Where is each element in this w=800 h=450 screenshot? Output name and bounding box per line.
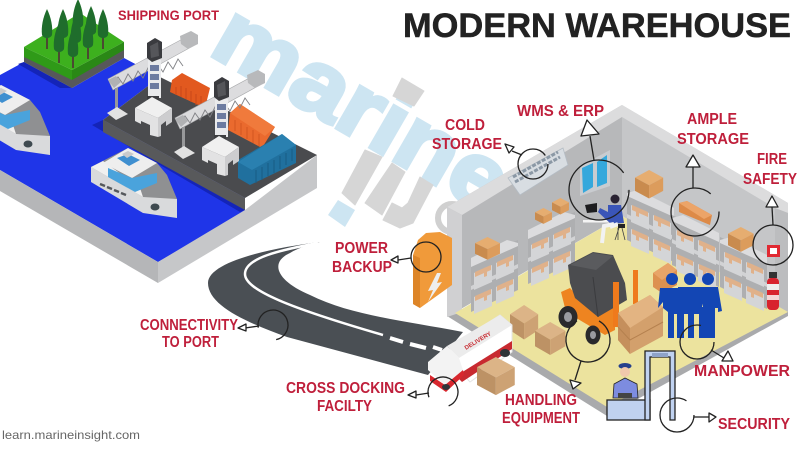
- dock: [103, 77, 317, 210]
- ship 2: [91, 148, 177, 218]
- callout: power backup: BACKUP: [332, 259, 392, 276]
- callout: cross docking facility: CROSS DOCKING: [286, 380, 405, 397]
- orange box behind people: [653, 263, 677, 293]
- callout: security: SECURITY: [718, 416, 790, 433]
- delivery truck: DELIVERY: [464, 331, 493, 352]
- crane 2: [174, 70, 265, 176]
- people: manpower: [658, 273, 722, 338]
- callout: connectivity to port: [140, 308, 290, 351]
- ship 1: [0, 85, 50, 155]
- security guard: [607, 363, 650, 420]
- callout: wms and erp: [517, 103, 629, 220]
- callout: handling equipment: [502, 310, 618, 427]
- panel: warehouse building: [447, 105, 788, 416]
- callout: security: [660, 398, 790, 433]
- delivery truck: [428, 315, 512, 392]
- icon: fire safety sign: [767, 245, 780, 257]
- cardboard boxes on floor: [510, 305, 565, 355]
- callout: cold storage: COLD: [445, 117, 485, 134]
- callout: power backup: [332, 240, 441, 276]
- callout: power backup: POWER: [335, 240, 388, 257]
- power backup unit: [413, 232, 452, 308]
- orange container 2: [228, 104, 275, 148]
- callout: handling equipment: EQUIPMENT: [502, 410, 580, 427]
- website credit: learn.marineinsight.com: [2, 428, 140, 442]
- callout: fire safety: [743, 151, 797, 265]
- icon: air conditioner: [508, 148, 568, 195]
- callout: manpower: [680, 325, 790, 380]
- callout: ample storage: AMPLE: [687, 111, 737, 128]
- road: [208, 242, 463, 375]
- callout: cold storage: [432, 117, 548, 179]
- heading: shipping port: SHIPPING PORT: [118, 7, 219, 23]
- callout: manpower: MANPOWER: [694, 363, 790, 380]
- water: [0, 58, 245, 262]
- callout: fire safety: FIRE: [757, 151, 787, 168]
- callout: ample storage: [671, 111, 749, 236]
- callout: cross docking facility: FACILTY: [317, 398, 372, 415]
- orange container 1: [170, 73, 210, 108]
- title: MODERN WAREHOUSE: [403, 7, 791, 45]
- panel: shipping port: [0, 0, 317, 283]
- icon: window: [580, 150, 610, 196]
- shelves: [471, 170, 767, 314]
- forest island: [24, 0, 124, 88]
- cardboard stack: [618, 295, 663, 354]
- callout: ample storage: STORAGE: [677, 131, 749, 148]
- callout: wms and erp: WMS & ERP: [517, 103, 604, 120]
- callout: handling equipment: HANDLING: [505, 392, 577, 409]
- callout: connectivity to port: CONNECTIVITY: [140, 317, 238, 334]
- crane 1: [107, 31, 198, 137]
- callout: cross docking facility: [286, 373, 462, 415]
- land edge: [0, 170, 158, 283]
- callout: connectivity to port: TO PORT: [162, 334, 219, 351]
- metal detector: [645, 351, 675, 420]
- fire extinguisher: [767, 272, 779, 310]
- office worker: [583, 194, 625, 243]
- blue container: [238, 134, 296, 185]
- callout: cold storage: STORAGE: [432, 136, 502, 153]
- forklift: [558, 252, 638, 344]
- cardboard box by truck: [477, 357, 515, 395]
